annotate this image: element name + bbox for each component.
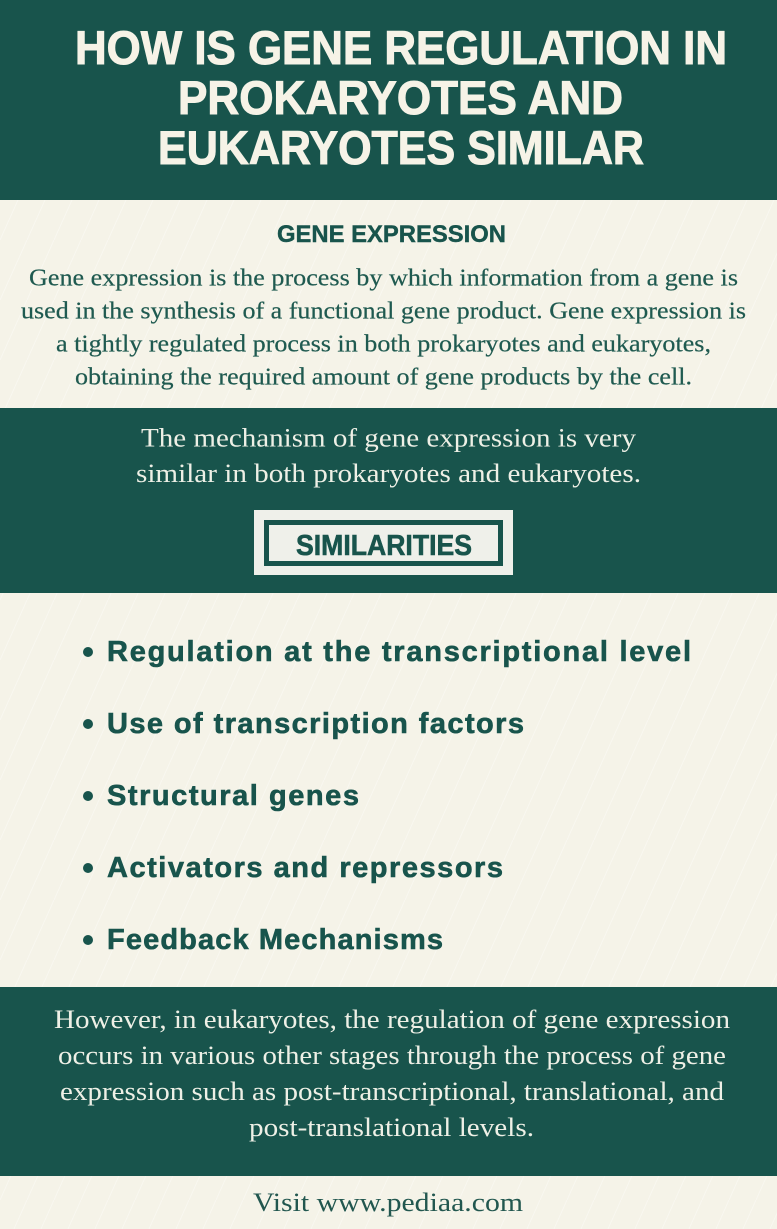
text block: gene expression definition: Gene expression is the process by which information from a gene is [29, 266, 738, 292]
title: EUKARYOTES SIMILAR [158, 121, 644, 174]
list item: feedback mechanisms: Feedback Mechanisms [107, 924, 443, 956]
text block: mechanism statement: The mechanism of gene expression is very [141, 422, 637, 452]
text block: eukaryote regulation: occurs in various other stages through the process of gene [58, 1040, 726, 1070]
footer: source link: Visit www.pediaa.com [253, 1187, 523, 1217]
title: HOW IS GENE REGULATION IN [75, 21, 727, 74]
text block: mechanism statement [136, 422, 641, 488]
text block: eukaryote regulation: However, in eukaryotes, the regulation of gene expression [54, 1004, 730, 1034]
list item: transcriptional level: Regulation at the transcriptional level [107, 636, 691, 668]
heading box: similarities [254, 510, 513, 575]
list item: transcription factors: Use of transcription factors [107, 708, 524, 740]
text block: eukaryote regulation: expression such as post-transcriptional, translational, and [60, 1076, 724, 1106]
panel: mechanism and similarities banner [0, 408, 777, 593]
title: PROKARYOTES AND [178, 71, 623, 124]
title [75, 21, 727, 174]
list item: structural genes: Structural genes [107, 780, 359, 812]
panel: title header [0, 0, 777, 200]
text block: gene expression definition: a tightly regulated process in both prokaryotes and eukaryotes, [56, 332, 711, 358]
text block: eukaryote regulation [54, 1004, 730, 1142]
text block: gene expression definition: used in the synthesis of a functional gene product. Gene expression is [21, 298, 746, 324]
text block: gene expression definition: obtaining the required amount of gene products by the cell. [75, 364, 692, 390]
text block: eukaryote regulation: post-translational levels. [249, 1112, 534, 1142]
text block: mechanism statement: similar in both prokaryotes and eukaryotes. [136, 458, 641, 488]
heading box: similarities: SIMILARITIES [296, 530, 472, 562]
panel: eukaryote regulation note [0, 987, 777, 1176]
heading: gene expression: GENE EXPRESSION [277, 221, 506, 248]
panel: gene expression [21, 221, 746, 390]
panel: list of similarities [83, 636, 691, 956]
list item: activators and repressors: Activators and repressors [107, 852, 503, 884]
text block: gene expression definition [21, 266, 746, 390]
